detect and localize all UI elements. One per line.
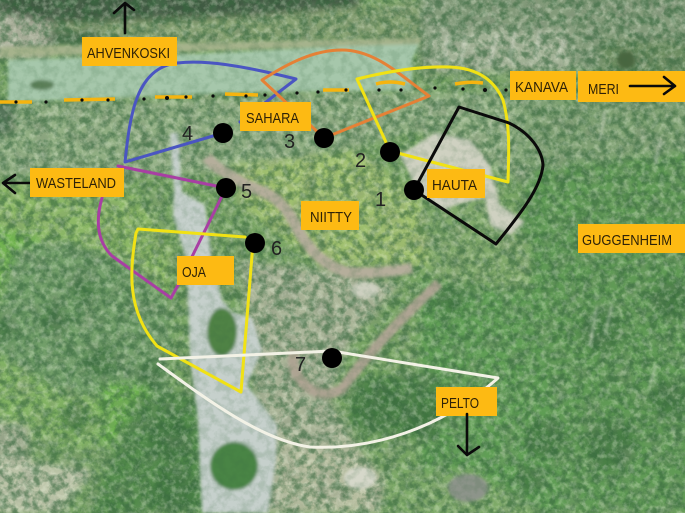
upper left meadow xyxy=(0,14,55,58)
label: Niitty: NIITTY xyxy=(310,209,352,226)
label: Wasteland xyxy=(30,168,124,197)
viewshed 1: black xyxy=(414,107,543,244)
shrub strip behind field xyxy=(50,0,430,46)
mid shrubs xyxy=(0,92,560,200)
bush clusters xyxy=(0,278,685,512)
lower road xyxy=(293,283,439,394)
point 7: 7 xyxy=(295,354,306,376)
field xyxy=(8,42,420,102)
point 4 xyxy=(182,123,233,145)
dashed boundary line: Kanava xyxy=(0,82,508,104)
point 7 xyxy=(295,348,342,376)
label: Ahvenkoski xyxy=(82,37,177,66)
label: Ahvenkoski: AHVENKOSKI xyxy=(87,45,170,62)
label: Niitty xyxy=(301,201,359,230)
white trunks xyxy=(445,30,660,385)
arrow: south to Pelto xyxy=(458,414,479,455)
point 2: 2 xyxy=(355,150,366,172)
point 3: 3 xyxy=(284,131,295,153)
label: Meri: MERI xyxy=(588,81,619,98)
viewshed 3: orange xyxy=(262,50,429,138)
label: Sahara: SAHARA xyxy=(246,110,299,127)
point 2 xyxy=(355,142,400,172)
point 4: 4 xyxy=(182,123,193,145)
label: Oja: OJA xyxy=(182,264,206,281)
right forest xyxy=(500,150,685,513)
label: Hauta xyxy=(427,169,485,198)
point 6: 6 xyxy=(271,238,282,260)
arrow: west to Wasteland xyxy=(3,175,30,193)
point 1 xyxy=(375,180,424,211)
left grass xyxy=(0,180,170,300)
label: Wasteland: WASTELAND xyxy=(36,175,116,192)
lower left bushes xyxy=(0,240,170,400)
label: Kanava xyxy=(510,71,576,100)
bottom left rock xyxy=(0,455,95,513)
bottom bush right xyxy=(380,470,540,513)
middle right shrub xyxy=(520,100,685,170)
point 1: 1 xyxy=(375,189,386,211)
label: Oja xyxy=(177,256,234,285)
arrow: north to Ahvenkoski xyxy=(114,3,134,33)
label: Guggenheim: GUGGENHEIM xyxy=(582,232,672,249)
rock patches xyxy=(351,282,379,298)
viewshed 7: white xyxy=(158,351,498,447)
point 3 xyxy=(284,128,334,153)
point 6 xyxy=(245,233,282,260)
label: Hauta: HAUTA xyxy=(432,177,477,194)
viewshed 4: blue xyxy=(125,62,296,162)
island xyxy=(210,442,258,490)
upper road xyxy=(207,157,412,273)
top forest band xyxy=(0,0,360,24)
viewshed 2: yellow xyxy=(357,67,509,182)
arrow: east to Meri xyxy=(630,77,675,94)
label: Guggenheim xyxy=(578,224,685,253)
point 5: 5 xyxy=(241,181,252,203)
point 5 xyxy=(216,178,252,203)
label: Kanava: KANAVA xyxy=(515,79,568,96)
viewshed 5: purple xyxy=(98,166,226,298)
grey-brown centre xyxy=(240,260,400,513)
label: Pelto xyxy=(436,387,497,416)
central grass meadow xyxy=(230,150,430,265)
label: Pelto: PELTO xyxy=(441,395,479,412)
right upper forest xyxy=(420,0,685,70)
viewshed 6: yellow xyxy=(132,229,253,392)
pit sand xyxy=(400,133,525,235)
stream xyxy=(170,133,277,513)
label: Meri xyxy=(578,71,685,102)
label: Sahara xyxy=(240,102,311,131)
